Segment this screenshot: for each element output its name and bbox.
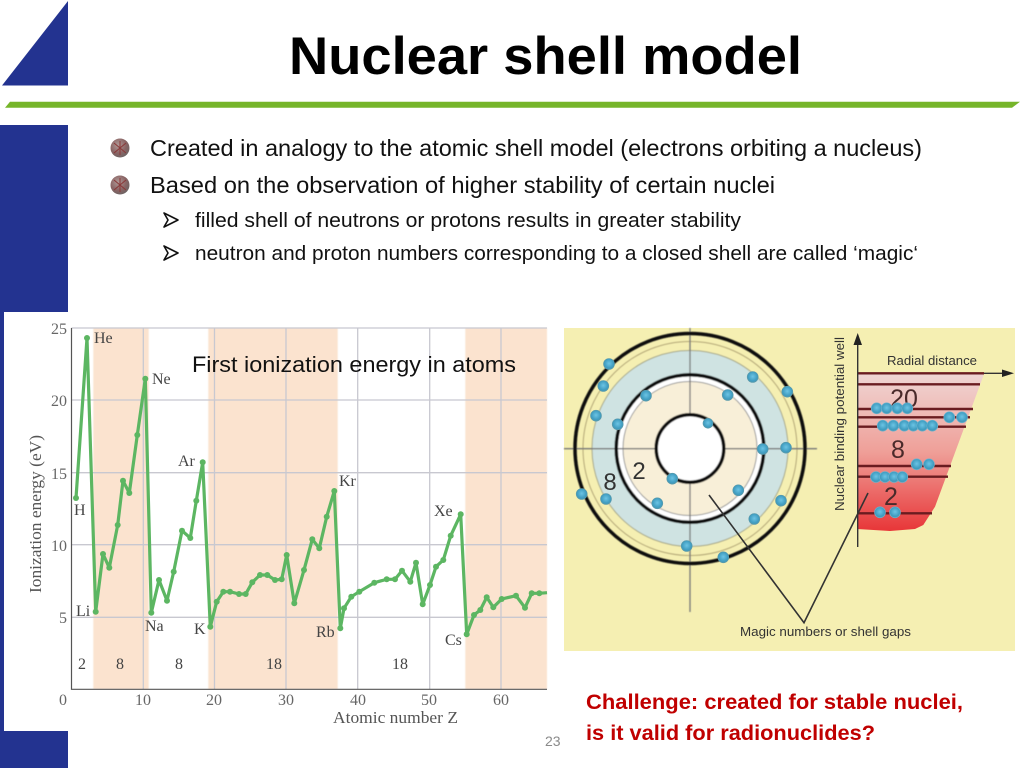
callout: challenge question xyxy=(586,690,963,745)
magic number pointer lines xyxy=(709,493,868,623)
element labels: Rb xyxy=(316,624,335,641)
shell capacity numbers: 8 xyxy=(175,656,183,673)
ionization energy line xyxy=(76,338,547,634)
element labels: Xe xyxy=(434,503,453,520)
shell capacity numbers xyxy=(78,656,408,673)
navy left sidebar xyxy=(0,125,68,768)
icon: sub-bullet arrow 1 xyxy=(164,213,178,227)
y axis ticks: 10 xyxy=(51,538,67,555)
y axis ticks: 25 xyxy=(51,321,67,338)
period bands xyxy=(93,328,547,689)
y axis title: Ionization energy (eV) xyxy=(26,435,45,593)
element labels: Ar xyxy=(178,453,196,470)
x axis ticks: 50 xyxy=(421,692,437,709)
sub-bullet text 1: filled shell of neutrons or protons results in greater stability xyxy=(195,209,742,232)
magic numbers label: Magic numbers or shell gaps xyxy=(740,625,911,639)
y axis ticks xyxy=(51,321,67,627)
x axis title: Atomic number Z xyxy=(333,708,458,727)
bullet list xyxy=(110,135,922,265)
circle shell numbers: 2 xyxy=(632,458,646,485)
shell capacity numbers: 18 xyxy=(392,656,408,673)
data markers xyxy=(73,335,542,637)
element labels: Li xyxy=(76,603,91,620)
figure background xyxy=(564,328,1015,651)
page number: 23 xyxy=(545,733,561,749)
potential well xyxy=(857,373,984,531)
y axis ticks: 20 xyxy=(51,393,67,410)
shell electrons xyxy=(576,358,793,563)
shell capacity numbers: 18 xyxy=(266,656,282,673)
energy levels xyxy=(858,373,984,513)
radial distance label: Radial distance xyxy=(887,354,977,368)
well numbers: 8 xyxy=(891,436,905,464)
x axis ticks: 60 xyxy=(493,692,509,709)
element labels: Ne xyxy=(152,371,171,388)
circle shell numbers: 8 xyxy=(603,469,617,496)
x axis ticks xyxy=(59,692,509,709)
callout: challenge question: is it valid for radionuclides? xyxy=(586,721,875,745)
axis arrowheads xyxy=(854,333,1014,377)
shell capacity numbers: 8 xyxy=(116,656,124,673)
element labels: Na xyxy=(145,618,164,635)
title: Nuclear shell model xyxy=(289,27,802,86)
well y axis label: Nuclear binding potential well xyxy=(833,337,847,511)
x axis ticks: 40 xyxy=(350,692,366,709)
figure: nuclear shell diagram xyxy=(564,328,1015,651)
well numbers xyxy=(884,385,918,511)
circle shell numbers xyxy=(603,458,646,496)
element labels: He xyxy=(94,330,113,347)
navy corner triangle xyxy=(2,1,68,86)
chart: first ionization energy xyxy=(26,321,547,727)
x axis ticks: 0 xyxy=(59,692,67,709)
icon: sub-bullet arrow 2 xyxy=(164,246,178,260)
well numbers: 20 xyxy=(890,385,918,413)
x axis ticks: 30 xyxy=(278,692,294,709)
well axes xyxy=(858,340,1006,547)
y axis ticks: 5 xyxy=(59,610,67,627)
icon: bullet 1 xyxy=(110,138,130,158)
callout: challenge question: Challenge: created for stable nuclei, xyxy=(586,690,963,714)
element labels: Kr xyxy=(339,473,357,490)
shell capacity numbers: 2 xyxy=(78,656,86,673)
element labels: Cs xyxy=(445,632,462,649)
shell circles xyxy=(564,328,817,612)
element labels: H xyxy=(74,502,86,519)
element labels xyxy=(74,330,462,649)
green title rule xyxy=(5,102,1020,108)
bullet text 2: Based on the observation of higher stability of certain nuclei xyxy=(150,172,775,198)
chart caption: First ionization energy in atoms xyxy=(192,352,516,377)
y axis ticks: 15 xyxy=(51,466,67,483)
icon: bullet 2 xyxy=(110,176,130,194)
well numbers: 2 xyxy=(884,483,898,511)
x axis ticks: 10 xyxy=(135,692,151,709)
well electrons xyxy=(870,403,968,518)
bullet text 1: Created in analogy to the atomic shell model (electrons orbiting a nucleus) xyxy=(150,135,922,161)
x axis ticks: 20 xyxy=(206,692,222,709)
element labels: K xyxy=(194,621,206,638)
sub-bullet text 2: neutron and proton numbers corresponding to a closed shell are called ‘magic‘ xyxy=(195,242,918,265)
